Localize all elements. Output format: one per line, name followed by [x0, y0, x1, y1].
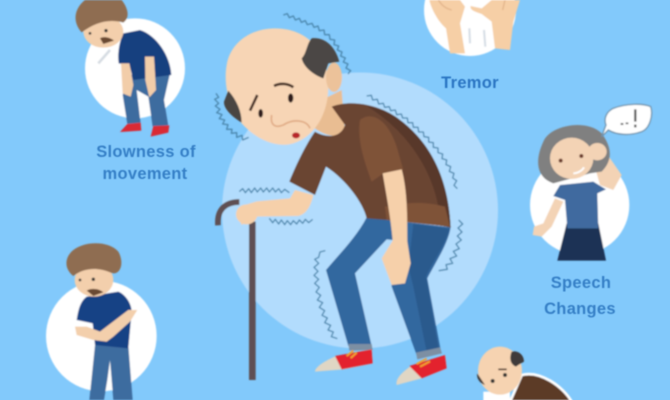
- head: [226, 28, 328, 145]
- white circle: [46, 281, 157, 391]
- label: changes: Changes: [544, 300, 616, 318]
- arms: [121, 57, 156, 97]
- label: tremor: Tremor: [441, 74, 499, 92]
- shirt: [289, 103, 451, 227]
- right hand: [470, 0, 520, 50]
- shoes: [315, 349, 447, 385]
- head: [83, 16, 123, 48]
- white collar: [483, 392, 510, 400]
- blouse: [553, 182, 606, 228]
- cane: [218, 202, 252, 380]
- label: movement: movement: [103, 165, 188, 183]
- hair and face: [477, 351, 524, 385]
- hair: [538, 125, 610, 183]
- ear: [326, 63, 342, 92]
- arms: [533, 147, 622, 237]
- hair: [302, 38, 339, 78]
- label: slowness of movement: Slowness of: [96, 143, 196, 161]
- shake marks: [469, 28, 485, 47]
- hair: [76, 0, 128, 32]
- head: [478, 347, 522, 395]
- neck: [315, 90, 345, 136]
- arm holding cane: [237, 190, 313, 225]
- face: [550, 138, 593, 179]
- finger creases: [438, 0, 505, 10]
- vignette: slowness of movement figure: [76, 0, 185, 137]
- jeans: [326, 217, 451, 355]
- shirt shadow along back: [367, 106, 451, 227]
- raised hand: [588, 143, 607, 160]
- jeans shading: [408, 224, 449, 352]
- white circle: [85, 18, 185, 118]
- vignette: speech changes figure: [530, 104, 652, 261]
- shirt: [77, 292, 132, 348]
- shoes: [120, 123, 169, 137]
- labels: [96, 74, 616, 318]
- tremor lines: [215, 14, 463, 339]
- main figure backdrop circle: [222, 72, 498, 348]
- skirt: [557, 223, 606, 261]
- vignette: bottom right man: [477, 347, 572, 400]
- trouser cuffs: [348, 344, 442, 359]
- shirt: [118, 30, 171, 80]
- white circle: [530, 155, 629, 255]
- hand on cane: [236, 204, 257, 224]
- jeans: [89, 345, 133, 400]
- white circle: [424, 0, 516, 56]
- breath mark: [98, 50, 110, 63]
- face details: [250, 84, 310, 138]
- hanging arm: [382, 169, 411, 285]
- speech bubble: [602, 104, 652, 137]
- left hand: [429, 0, 465, 53]
- sleeve highlight: [359, 116, 450, 227]
- jeans: [123, 71, 171, 127]
- hair: [66, 243, 121, 276]
- vignette: rigidity figure bottom left: [46, 243, 157, 400]
- label: speech: Speech: [551, 274, 611, 292]
- head: [75, 263, 113, 297]
- white outline and shirt: [510, 374, 572, 400]
- vignette: tremor hands: [424, 0, 520, 56]
- main figure: elderly man with cane: [215, 14, 463, 385]
- arms and hands: [75, 310, 137, 342]
